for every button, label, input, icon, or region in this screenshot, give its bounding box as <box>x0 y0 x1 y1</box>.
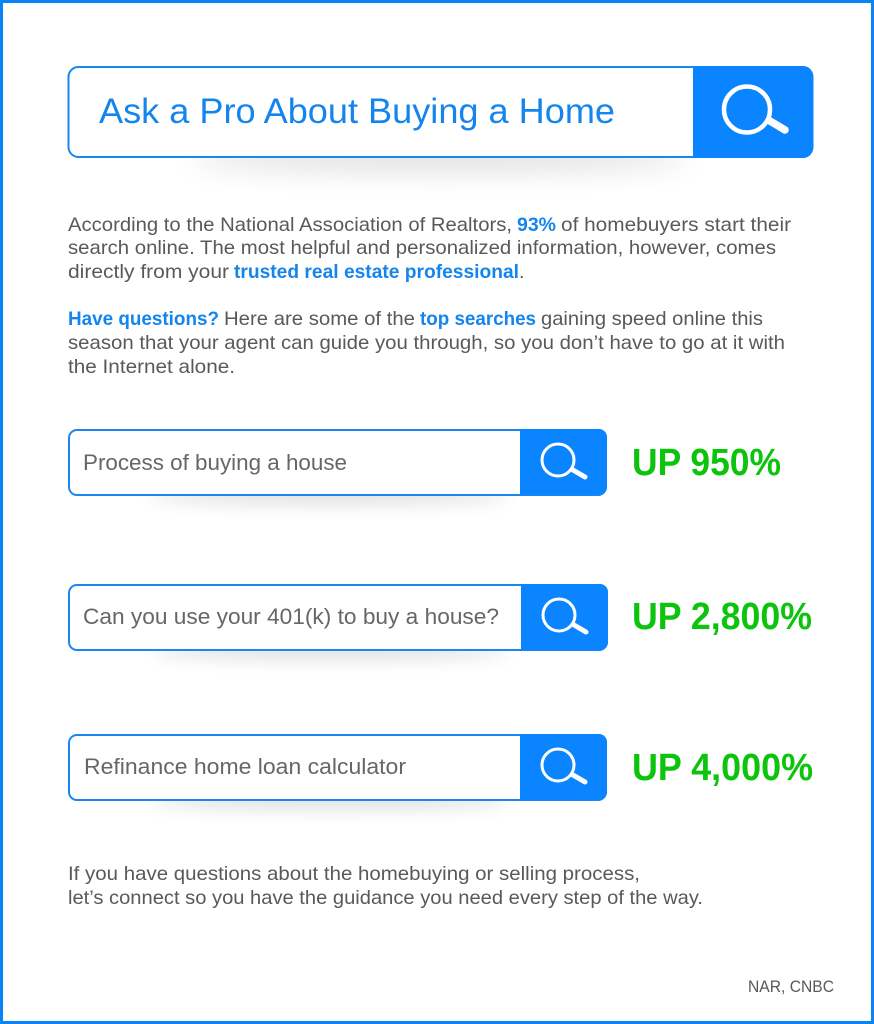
stat: up 4,000%: UP 4,000% <box>632 747 813 789</box>
intro paragraph: . <box>519 261 524 283</box>
intro paragraph <box>68 214 792 283</box>
closing text: let’s connect so you have the guidance you need every step of the way. <box>68 887 703 909</box>
search button <box>520 734 607 800</box>
icon: magnifier <box>542 749 585 782</box>
stat: up 950%: UP 950% <box>632 442 781 484</box>
questions paragraph: Here are some of the <box>224 308 415 330</box>
questions paragraph: Have questions? <box>68 308 219 330</box>
main search bar <box>68 66 813 171</box>
questions paragraph: top searches <box>420 308 536 330</box>
search text: Can you use your 401(k) to buy a house? <box>83 604 499 629</box>
questions paragraph <box>68 308 785 378</box>
closing text <box>68 863 703 909</box>
search row 2 <box>69 584 608 659</box>
intro paragraph: of homebuyers start their <box>561 214 792 236</box>
questions paragraph: the Internet alone. <box>68 356 235 378</box>
search text: Process of buying a house <box>83 450 347 475</box>
intro paragraph: According to the National Association of Realtors, <box>68 214 512 236</box>
questions paragraph: gaining speed online this <box>541 308 763 330</box>
main search button <box>693 66 813 158</box>
intro paragraph: directly from your <box>68 261 230 283</box>
search text: Refinance home loan calculator <box>84 754 406 779</box>
stat: up 2,800%: UP 2,800% <box>632 596 812 638</box>
search row 3 <box>69 734 607 809</box>
source credit: NAR, CNBC <box>748 978 834 996</box>
search button <box>520 429 607 495</box>
closing text: If you have questions about the homebuying or selling process, <box>68 863 640 885</box>
icon: magnifier <box>542 444 585 477</box>
intro paragraph: search online. The most helpful and personalized information, however, comes <box>68 237 776 259</box>
intro paragraph: 93% <box>517 214 556 236</box>
title: Ask a Pro About Buying a Home <box>99 92 615 131</box>
search row 1 <box>69 429 607 504</box>
icon: magnifier <box>543 599 586 632</box>
icon: magnifier <box>724 86 785 132</box>
questions paragraph: season that your agent can guide you through, so you don’t have to go at it with <box>68 332 785 354</box>
search button <box>521 584 608 650</box>
intro paragraph: trusted real estate professional <box>234 261 519 283</box>
